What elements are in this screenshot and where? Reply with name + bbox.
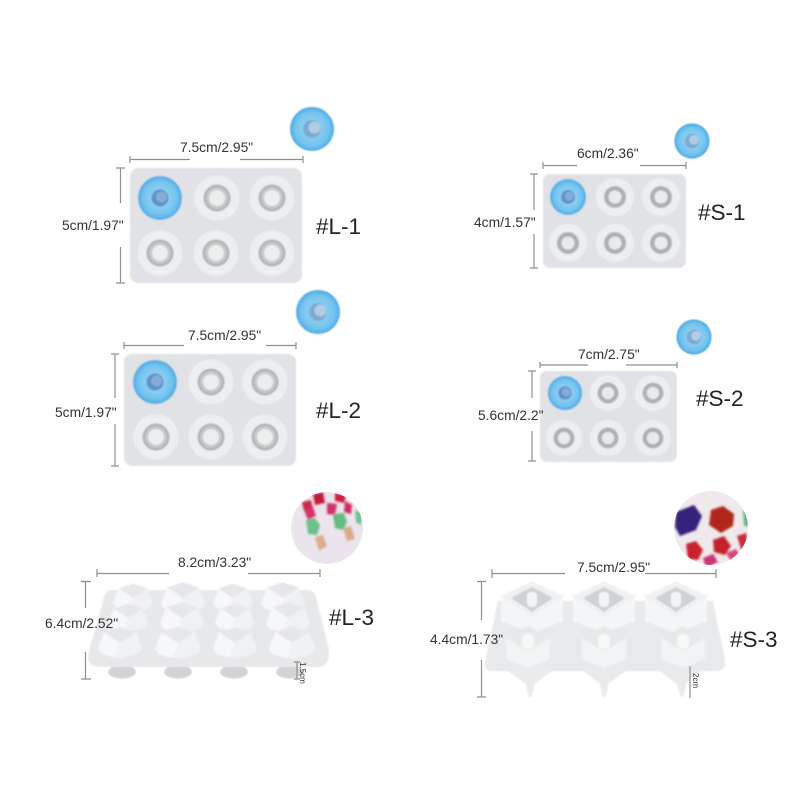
panel: mold S-3 — [430, 491, 778, 698]
dimension lines S-2 — [528, 362, 677, 461]
mold tray S-2 — [540, 371, 677, 462]
width label L-3: 8.2cm/3.23" — [178, 555, 251, 570]
width label S-1: 6cm/2.36" — [577, 146, 639, 161]
icon: blue bead L-1 — [290, 107, 334, 151]
width label S-3: 7.5cm/2.95" — [577, 560, 650, 575]
photo: coloured gems L-3 — [291, 492, 363, 564]
name S-3: #S-3 — [730, 627, 778, 652]
panel: mold S-2 — [478, 319, 744, 462]
dimension lines L-3 — [81, 569, 320, 679]
mold tray S-3 — [485, 581, 725, 697]
mold tray S-1 — [543, 174, 686, 268]
height label S-1: 4cm/1.57" — [474, 215, 536, 230]
name L-1: #L-1 — [316, 214, 361, 239]
mold tray L-3 — [88, 582, 329, 678]
depth label L-3: 1.5cm — [298, 662, 307, 684]
name L-2: #L-2 — [316, 398, 361, 423]
panel: mold L-1 — [62, 107, 361, 283]
dimension lines L-2 — [111, 342, 296, 466]
height label L-2: 5cm/1.97" — [55, 405, 117, 420]
height label L-1: 5cm/1.97" — [62, 218, 124, 233]
photo: coloured gems S-3 — [674, 491, 750, 568]
depth label S-3: 2cm — [691, 673, 700, 688]
height label S-3: 4.4cm/1.73" — [430, 632, 503, 647]
height label S-2: 5.6cm/2.2" — [478, 408, 544, 423]
icon: blue bead S-1 — [674, 123, 710, 159]
icon: blue bead S-2 — [676, 319, 712, 355]
width label S-2: 7cm/2.75" — [578, 347, 640, 362]
width label L-2: 7.5cm/2.95" — [188, 328, 261, 343]
name S-1: #S-1 — [698, 200, 746, 225]
icon: blue bead L-2 — [296, 290, 340, 334]
width label L-1: 7.5cm/2.95" — [180, 140, 253, 155]
panel: mold L-2 — [55, 290, 361, 466]
height label L-3: 6.4cm/2.52" — [45, 616, 118, 631]
name S-2: #S-2 — [696, 386, 744, 411]
dimension lines S-1 — [530, 162, 686, 268]
mold tray L-2 — [124, 354, 296, 466]
name L-3: #L-3 — [329, 605, 374, 630]
panel: mold L-3 — [45, 492, 374, 684]
dimension lines L-1 — [116, 156, 303, 283]
mold tray L-1 — [130, 168, 302, 283]
panel: mold S-1 — [474, 123, 746, 268]
dimension lines S-3 — [477, 569, 716, 698]
